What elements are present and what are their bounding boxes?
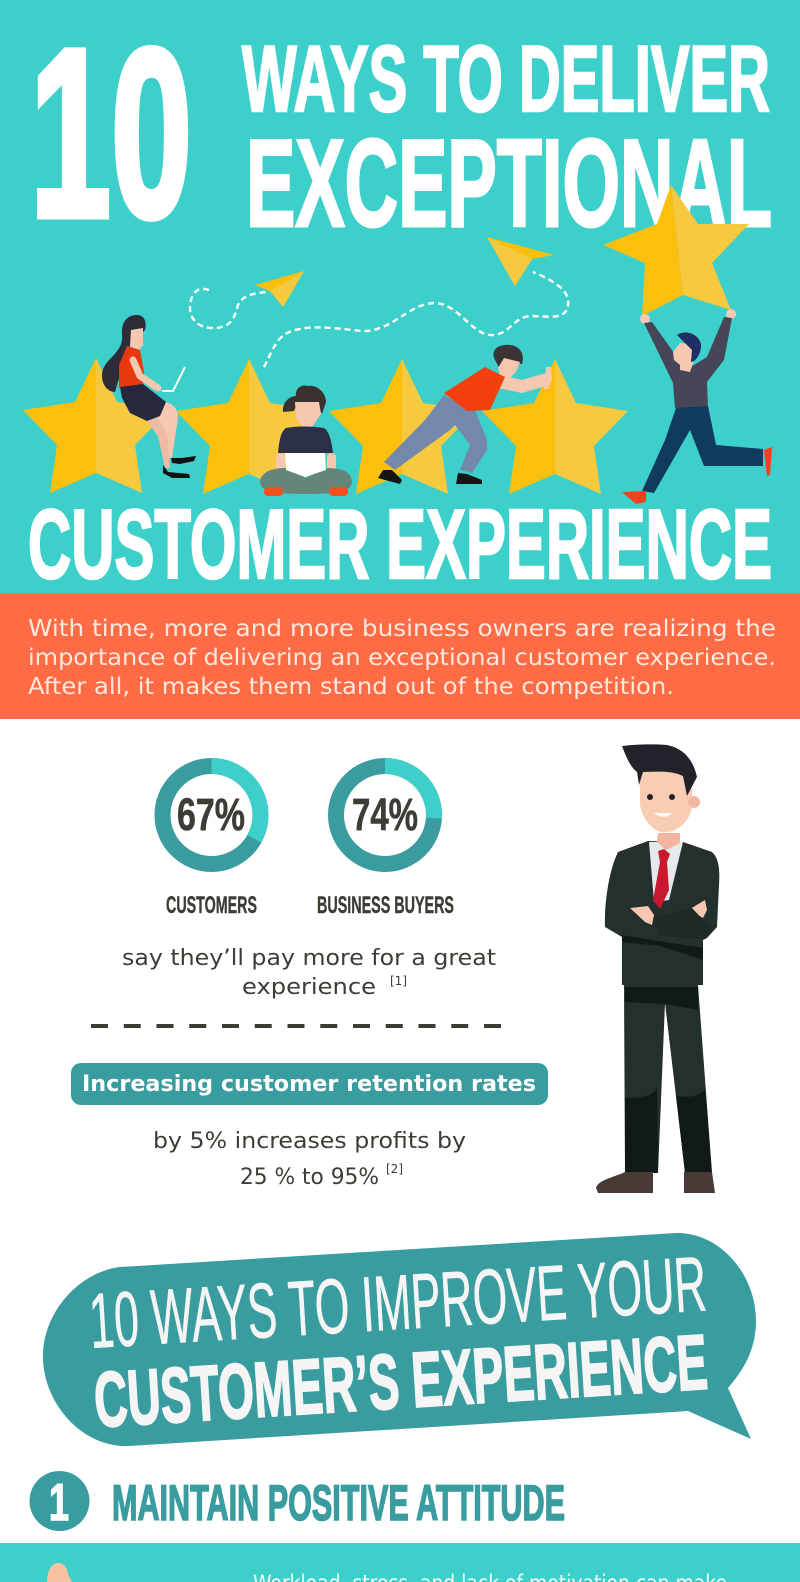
figure: man lifting star: [622, 309, 772, 504]
icon: star 1: [23, 358, 169, 493]
title: big number 10: 10: [30, 0, 192, 267]
text block: profits statement: by 5% increases profits by: [153, 1129, 466, 1154]
icon: hand at band edge: [47, 1563, 72, 1582]
figure: businessman with crossed arms: [596, 744, 719, 1193]
callout: retention pill: Increasing customer retention rates: [82, 1072, 536, 1097]
label: business buyers: BUSINESS BUYERS: [317, 892, 454, 919]
panel: tip one band: [0, 1543, 800, 1582]
text block: pay more statement: [122, 946, 496, 1000]
text block: intro paragraph: After all, it makes them stand out of the competition.: [28, 674, 674, 700]
chart: donut 74 percent: 74%: [352, 789, 418, 840]
label: customers: CUSTOMERS: [166, 892, 257, 919]
chart: donut 67 percent: [162, 766, 260, 864]
text block: pay more statement: [1]: [390, 974, 407, 988]
figure: man sitting with laptop: [260, 385, 352, 496]
icon: star 3: [329, 359, 475, 494]
panel: hero background: [0, 0, 800, 593]
text block: pay more statement: say they’ll pay more for a great: [122, 946, 496, 971]
panel: speech bubble heading: [43, 1233, 756, 1446]
dashed flight path: left plane: [190, 289, 268, 328]
panel: intro band: [0, 593, 800, 719]
icon: paper plane left: [255, 271, 304, 307]
text block: profits statement: 25 % to 95%: [240, 1165, 379, 1190]
figure: man pushing star: [378, 345, 552, 484]
callout: retention pill: [71, 1063, 548, 1105]
text block: pay more statement: experience: [242, 975, 376, 1000]
text block: intro paragraph: importance of delivering an exceptional customer experience.: [28, 645, 776, 671]
icon: paper plane right: [487, 237, 554, 286]
badge: number 1: 1: [49, 1474, 69, 1532]
chart: donut 67 percent: 67%: [177, 789, 245, 840]
figure: woman with laptop: [102, 315, 196, 478]
icon: star 4: [482, 359, 628, 494]
text block: intro paragraph: With time, more and more business owners are realizing the: [28, 616, 776, 642]
icon: big raised star: [603, 185, 749, 316]
dashed flight path: right plane: [264, 272, 568, 367]
text block: profits statement: [153, 1129, 466, 1190]
text block: profits statement: [2]: [386, 1162, 403, 1176]
chart: donut 74 percent: [336, 766, 434, 864]
text block: intro paragraph: [28, 616, 776, 700]
icon: star 2: [176, 359, 322, 494]
badge: number 1: [30, 1471, 90, 1532]
